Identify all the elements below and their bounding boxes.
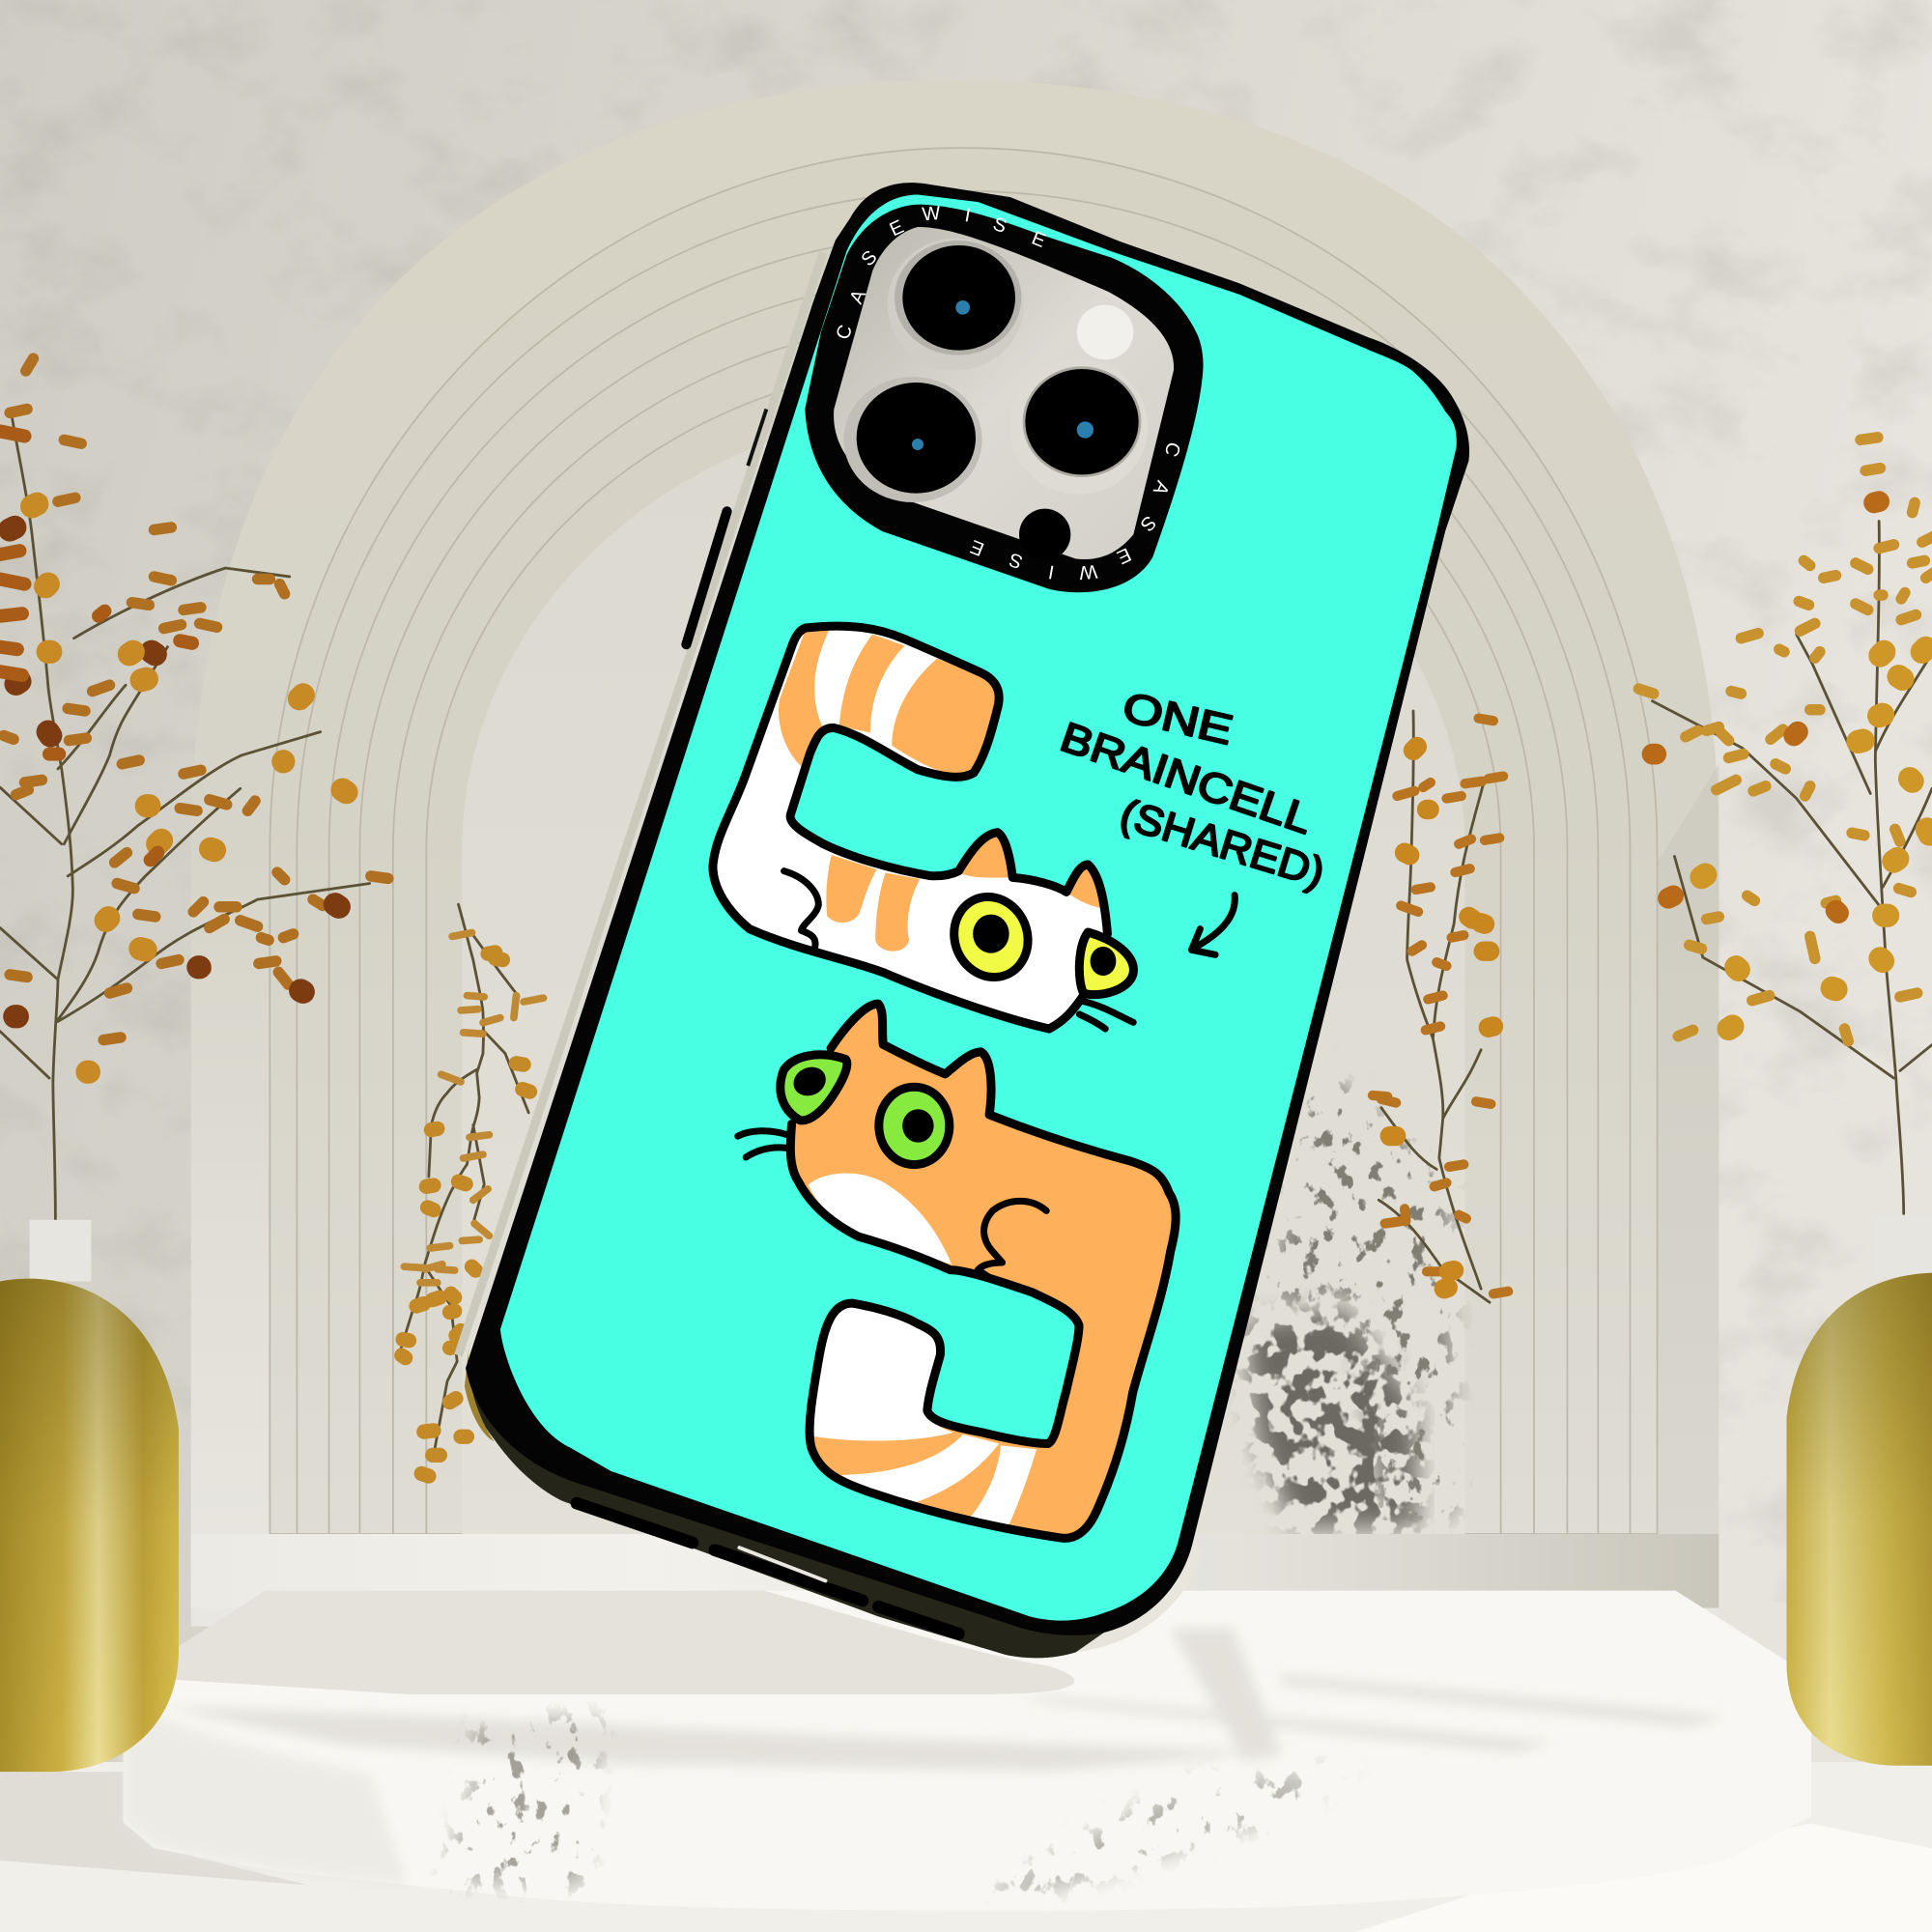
ring lettering: W [1078,560,1098,582]
ring lettering [833,203,1184,582]
cat side eye green [781,1055,847,1121]
ring lettering: S [1007,548,1026,573]
arch right shading [1658,764,1719,1540]
right vase [1786,1216,1932,1766]
lens lower left [843,377,982,502]
centre left branch [399,904,543,1476]
ring lettering: E [967,535,987,559]
ring lettering: A [1149,477,1173,498]
handwritten caption: BRAINCELL [1055,714,1319,843]
left plant [0,358,388,1220]
marble veining [1244,1060,1454,1528]
gold reflection [465,1343,494,1441]
arch ribs [270,148,1658,1534]
ring lettering: C [1160,439,1184,460]
ring lettering: S [990,213,1009,238]
camera ring [805,205,1204,592]
ring lettering: E [1029,228,1048,252]
floor [0,1762,1932,1932]
plinth light bands [160,1628,1725,1771]
plinth phone shadow [129,1591,1074,1694]
arrow [1191,895,1235,954]
whiskers and haunch [738,1131,1046,1277]
sensor [1019,509,1070,560]
lower right rim [1076,1543,1203,1652]
whiskers and haunch [784,871,1133,1029]
outer arch [191,80,1719,1627]
ring lettering: E [1114,543,1134,568]
plinth left shading [124,1696,407,1886]
charging port holes [577,1503,958,1634]
right plant [1638,438,1932,1213]
ring lettering: C [833,322,857,343]
ring lettering: S [1136,511,1160,535]
cat eye yellow [949,895,1033,980]
handwritten caption [1055,684,1330,896]
flash [1077,305,1133,359]
ring lettering: S [858,246,881,270]
lens top [888,239,1024,370]
ring lettering: A [846,286,870,307]
side rim [458,252,823,1355]
handwritten caption: ONE [1119,684,1237,754]
centre right branch [1373,711,1508,1302]
ring lettering: I [1047,560,1056,582]
plinth [124,1591,1811,1911]
ring lettering: W [922,203,941,225]
lower case body [466,1355,1109,1658]
camera window [834,227,1174,559]
white cat with orange tail [713,626,1133,1029]
ring lettering: I [963,205,972,227]
cat eye green [879,1087,950,1165]
cat side eye yellow [1079,932,1133,995]
handwritten caption: (SHARED) [1115,791,1330,896]
arch opening [462,407,1465,1534]
back ledge [191,1534,1719,1608]
orange cat with white tail [738,1004,1176,1538]
side buttons [686,511,727,644]
lens lower right [1009,359,1148,495]
left vase [0,1220,179,1772]
black case edge [466,183,1469,1635]
phone case body [458,183,1469,1658]
teal back panel [500,195,1457,1621]
camera module [805,203,1204,592]
plinth marble veining [443,1719,604,1886]
ring lettering: E [887,216,907,241]
phone [458,183,1469,1658]
